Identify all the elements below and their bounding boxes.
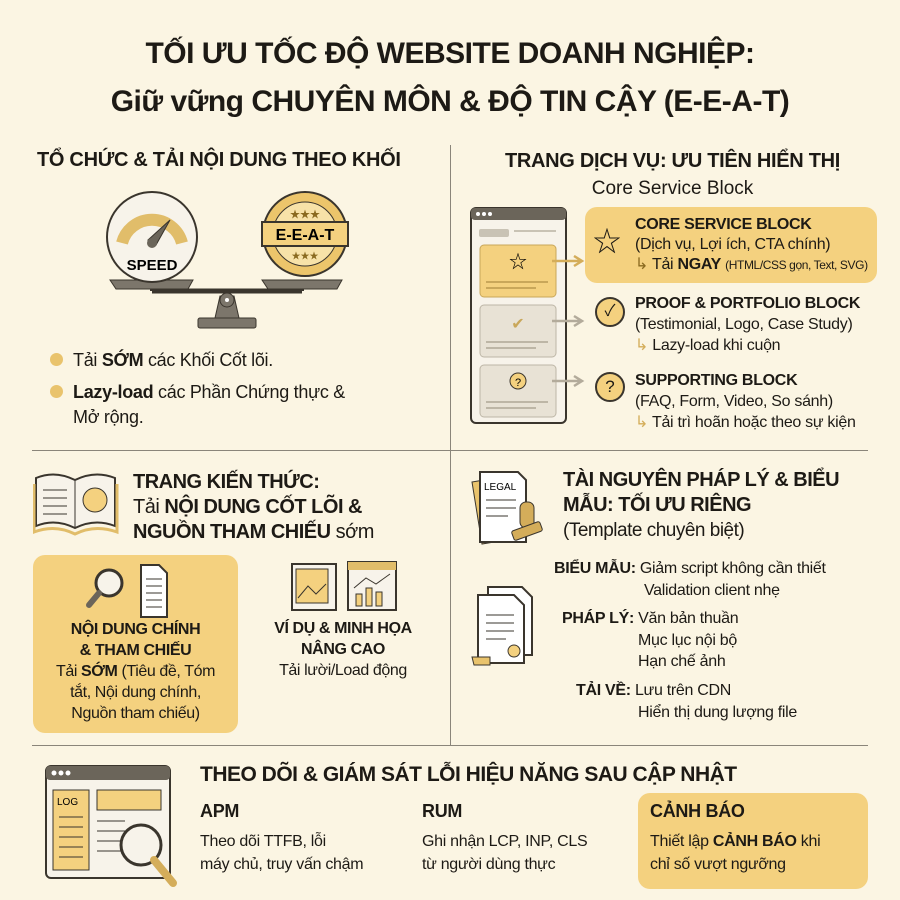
text: legal [562, 609, 738, 670]
text: forms: BIỂU MẪU: Giảm script không cần thiết [554, 560, 826, 577]
heading: THEO DÕI & GIÁM SÁT LỖI HIỆU NĂNG SAU CẬP NHẬT [200, 763, 737, 786]
heading: TRANG KIẾN THỨC: [133, 471, 319, 493]
text: legal: Hạn chế ảnh [638, 653, 725, 670]
panel: knowledge page: & THAM CHIẾU [80, 642, 191, 659]
heading: TRANG DỊCH VỤ: ƯU TIÊN HIỂN THỊ [505, 150, 840, 172]
panel: service page: ↳ Lazy-load khi cuộn [635, 337, 780, 354]
proof block [595, 297, 625, 327]
panel: service page: ☆ [593, 226, 621, 257]
text: RUM [422, 801, 587, 873]
panel: monitoring: CẢNH BÁO [650, 801, 745, 821]
heading: (Template chuyên biệt) [563, 520, 744, 541]
text: downloads: TẢI VỀ: Lưu trên CDN [576, 682, 731, 699]
icon: browser mockup: ☆ [509, 252, 527, 272]
supporting block: ? [605, 377, 615, 396]
proof block: ✓ [605, 303, 615, 320]
text: legal: Mục lục nội bộ [638, 632, 737, 648]
panel: block loading [37, 148, 401, 427]
panel: service page: PROOF & PORTFOLIO BLOCK [635, 295, 860, 312]
text: RUM: từ người dùng thực [422, 856, 555, 873]
bullets [50, 349, 345, 427]
bullets: Tải SỚM các Khối Cốt lõi. [73, 350, 273, 370]
text: RUM: RUM [422, 801, 462, 821]
panel: service page [470, 148, 877, 431]
panel: knowledge page: Nguồn tham chiếu) [71, 705, 200, 722]
text: APM: APM [200, 801, 239, 821]
icon: scale speed vs eeat: E-E-A-T [276, 227, 335, 244]
panel: monitoring: Thiết lập CẢNH BÁO khi [650, 833, 820, 850]
card: main content [33, 555, 238, 733]
text: RUM: Ghi nhận LCP, INP, CLS [422, 833, 587, 850]
icon: scale speed vs eeat: ★★★ [290, 210, 320, 221]
icon: scale speed vs eeat [106, 191, 349, 328]
heading [505, 148, 840, 199]
text: APM [200, 801, 363, 873]
icon: browser mockup: ✔ [511, 316, 525, 333]
card: advanced examples [274, 561, 412, 679]
text: downloads [576, 681, 797, 721]
arrows [552, 255, 584, 387]
panel: knowledge page: tắt, Nội dung chính, [70, 684, 201, 701]
title [111, 36, 789, 118]
panel: knowledge page: NỘI DUNG CHÍNH [71, 621, 200, 638]
heading: MẪU: TỐI ƯU RIÊNG [563, 494, 751, 516]
callout: alert [638, 793, 868, 889]
heading: Tải NỘI DUNG CỐT LÕI & [133, 496, 362, 518]
heading: TÀI NGUYÊN PHÁP LÝ & BIỂU [563, 469, 839, 491]
heading: NGUỒN THAM CHIẾU sớm [133, 521, 374, 543]
panel: service page: (Testimonial, Logo, Case Study) [635, 316, 852, 333]
text: legal: PHÁP LÝ: Văn bản thuần [562, 610, 738, 627]
callout: core service block [585, 207, 877, 283]
bullets: Lazy-load các Phần Chứng thực & [73, 382, 345, 402]
icon: documents [471, 586, 533, 666]
supporting block [595, 372, 625, 402]
panel: legal resources [471, 468, 839, 721]
icon: browser mockup [470, 207, 567, 424]
panel: knowledge page: Tải SỚM (Tiêu đề, Tóm [56, 663, 215, 680]
text: forms [554, 559, 826, 599]
panel: monitoring: chỉ số vượt ngưỡng [650, 856, 786, 873]
panel: service page: (FAQ, Form, Video, So sánh) [635, 393, 833, 410]
panel: service page: ↳ Tải trì hoãn hoặc theo sự kiện [635, 414, 856, 431]
text: forms: Validation client nhẹ [644, 582, 780, 599]
panel: service page: CORE SERVICE BLOCK [635, 216, 812, 233]
heading: TỔ CHỨC & TẢI NỘI DUNG THEO KHỐI [37, 149, 401, 171]
icon: book [33, 474, 118, 536]
heading [563, 468, 839, 541]
panel: service page: SUPPORTING BLOCK [635, 372, 797, 389]
text: APM: máy chủ, truy vấn chậm [200, 856, 363, 873]
text: downloads: Hiển thị dung lượng file [638, 704, 797, 721]
card: advanced examples: Tải lười/Load động [279, 662, 407, 679]
panel: knowledge page [33, 470, 412, 733]
icon: legal doc: LEGAL [484, 482, 517, 493]
title: Giữ vững CHUYÊN MÔN & ĐỘ TIN CẬY (E-E-A-T) [111, 85, 789, 118]
icon: scale speed vs eeat: ★★★ [291, 251, 319, 261]
icon: scale speed vs eeat: SPEED [127, 257, 178, 274]
icon: legal doc [471, 471, 543, 545]
panel: service page: ↳ Tải NGAY (HTML/CSS gọn, Text, SVG) [635, 256, 868, 273]
icon: log browser [45, 765, 177, 887]
card: advanced examples: NÂNG CAO [301, 641, 385, 658]
icon: browser mockup: ? [515, 377, 521, 389]
card: advanced examples: VÍ DỤ & MINH HỌA [274, 620, 412, 637]
heading [133, 470, 374, 543]
panel: monitoring [45, 762, 868, 889]
icon: log browser: LOG [57, 797, 78, 808]
text: APM: Theo dõi TTFB, lỗi [200, 833, 326, 850]
title: TỐI ƯU TỐC ĐỘ WEBSITE DOANH NGHIỆP: [145, 37, 755, 70]
bullets: Mở rộng. [73, 407, 143, 427]
panel: service page: (Dịch vụ, Lợi ích, CTA chính) [635, 236, 830, 253]
heading: Core Service Block [592, 178, 753, 199]
